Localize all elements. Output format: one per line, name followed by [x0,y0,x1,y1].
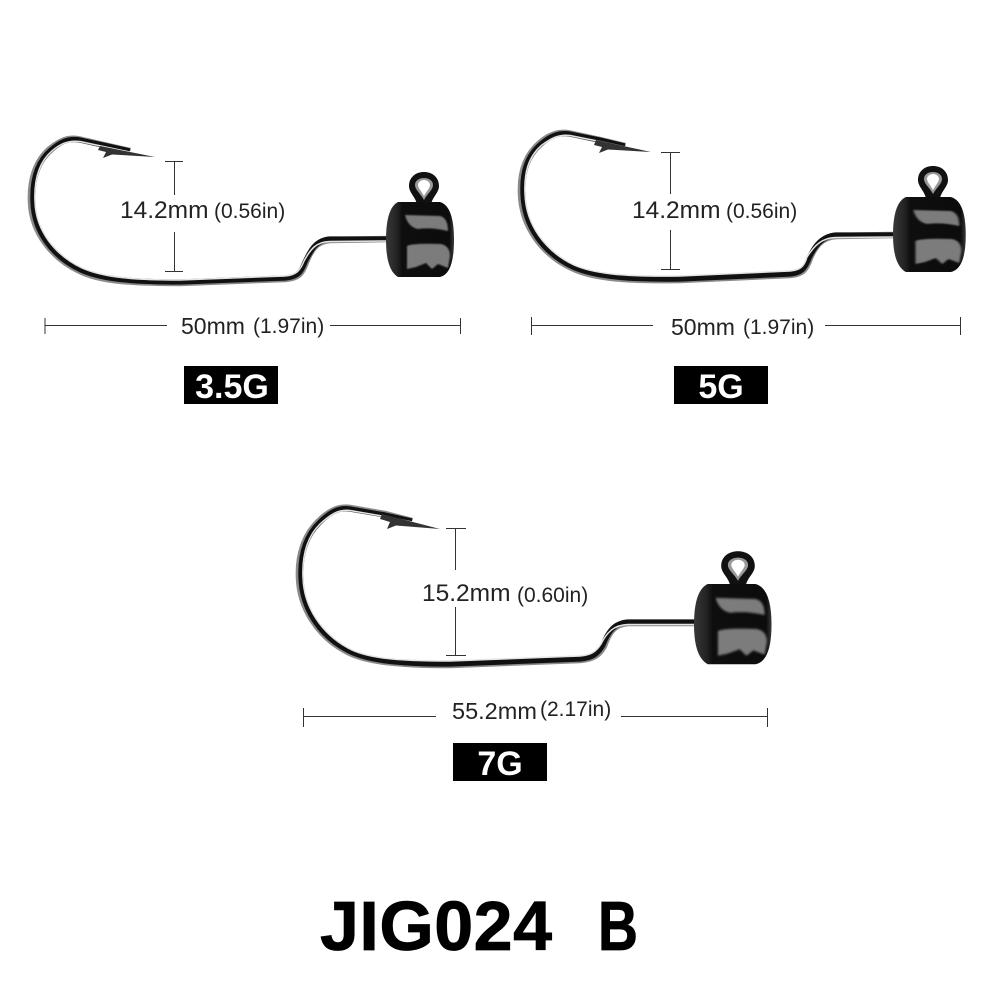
dimension: 3.5G gap height [120,161,285,272]
eyelet [721,551,755,586]
dimension: 5G gap height: (0.56in) [726,200,797,223]
dimension: 3.5G length: 50mm [181,313,245,339]
dimension: 3.5G length [45,313,460,339]
jig head hook: 7G [299,508,772,665]
dimension: 7G gap height: 15.2mm [422,580,511,607]
dimension: 7G length [304,698,768,727]
dimension: 3.5G length: (1.97in) [253,315,324,338]
hook point and barb [98,146,155,158]
weight tag: 5G: 5G [698,368,744,406]
weight tag: 7G: 7G [477,745,523,783]
title variant letter: B [598,887,638,965]
dimension: 5G length [532,314,960,340]
dimension: 5G length: (1.97in) [743,316,814,339]
weight tag: 3.5G: 3.5G [195,368,269,406]
dimension: 5G length: 50mm [671,314,735,340]
weighted head [694,584,772,664]
dimension: 3.5G gap height: (0.56in) [214,200,285,223]
dimension: 7G gap height [422,528,588,656]
jig head hook: 3.5G [31,139,454,283]
dimension: 3.5G gap height: 14.2mm [120,197,209,224]
weight tag: 5G [674,366,768,406]
weighted head [386,202,454,277]
eyelet [918,166,948,199]
dimension: 7G gap height: (0.60in) [517,584,588,607]
hook point and barb [380,514,440,529]
dimension: 7G length: (2.17in) [540,698,611,721]
dimension: 7G length: 55.2mm [452,698,537,724]
hook wire [299,508,696,665]
weight tag: 7G [453,743,547,783]
dimension: 5G gap height: 14.2mm [632,197,721,224]
eyelet [409,172,439,205]
hook wire [31,139,388,283]
weighted head [893,197,966,272]
hook point and barb [594,140,651,153]
hook wire [521,133,893,280]
dimension: 5G gap height [632,152,797,270]
title: JIG024 [320,887,552,965]
jig head hook: 5G [521,133,966,280]
